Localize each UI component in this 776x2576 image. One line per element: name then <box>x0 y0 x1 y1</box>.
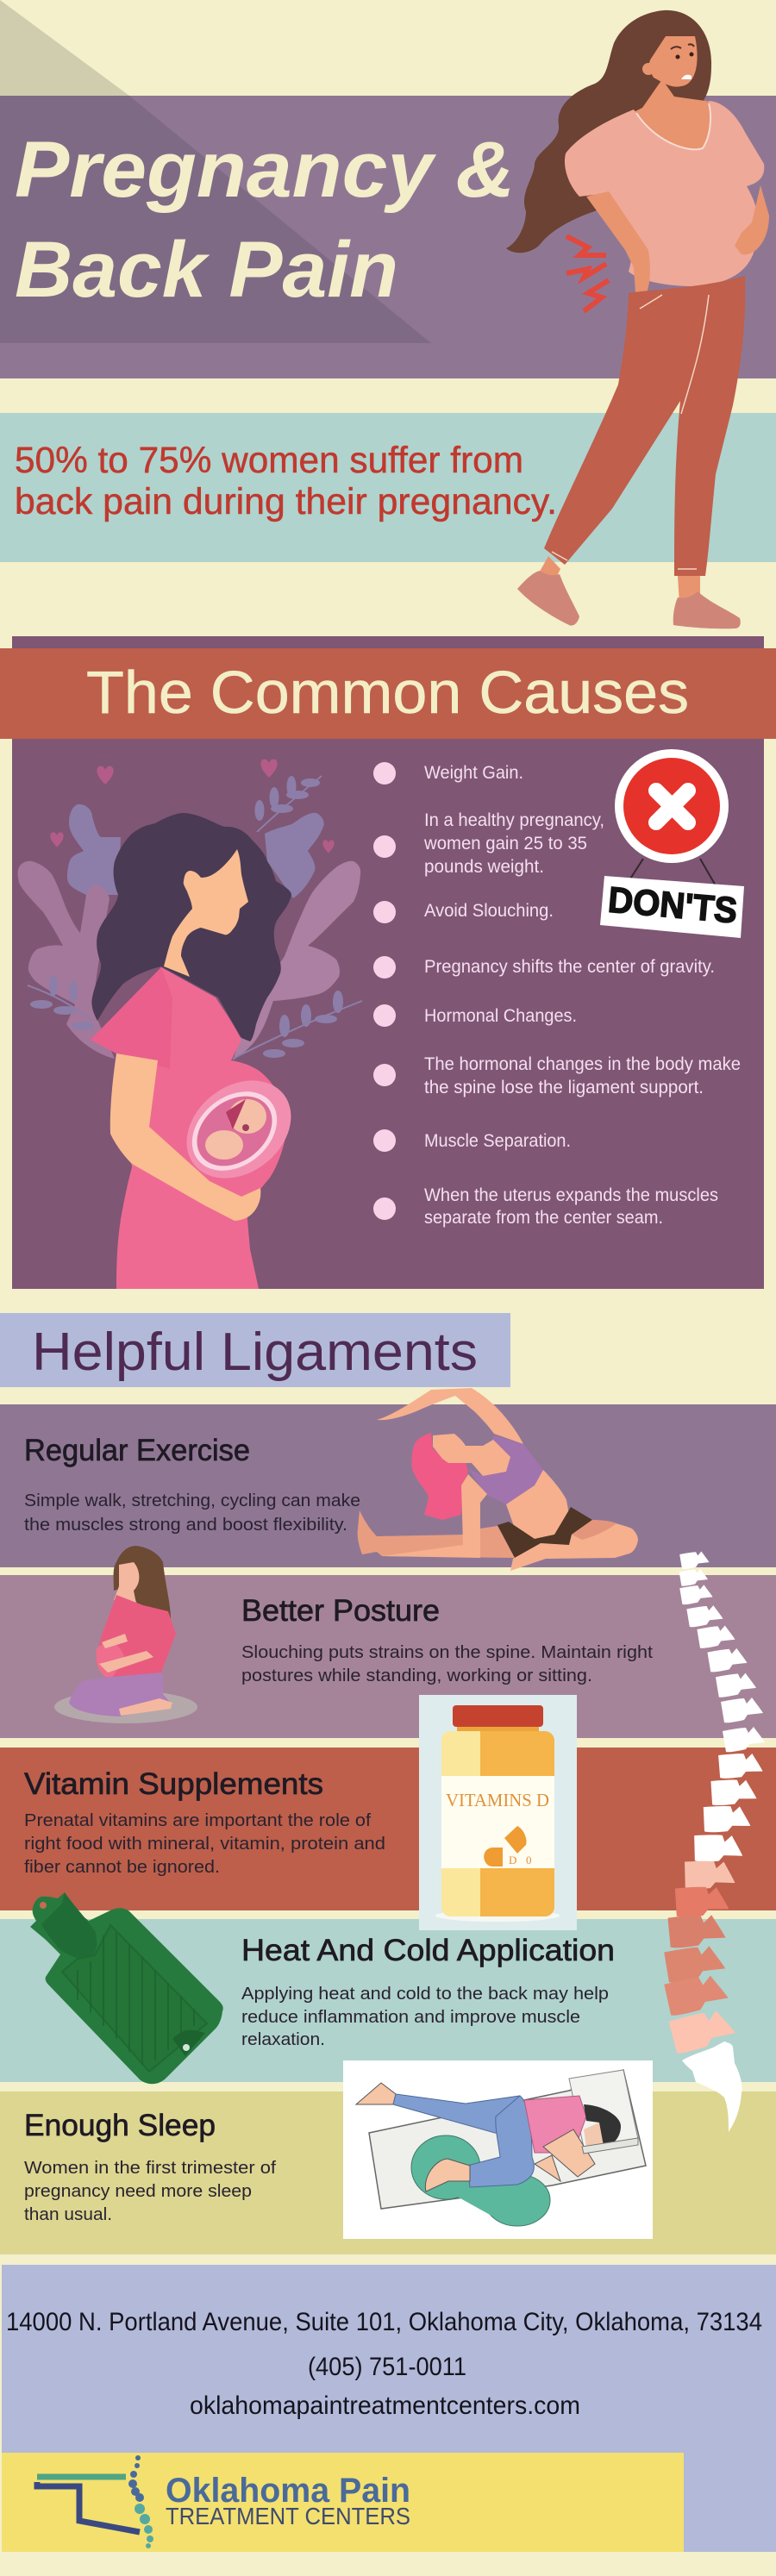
illustration: yoga stretch <box>358 1388 638 1571</box>
panel: regular exercise: the muscles strong and boost flexibility. <box>24 1515 347 1535</box>
bullet list: Hormonal Changes. <box>424 1006 577 1026</box>
illustration: hot water bottle <box>30 1892 223 2084</box>
panel: enough sleep: Enough Sleep <box>24 2109 216 2142</box>
panel: enough sleep: than usual. <box>24 2204 112 2224</box>
header panel <box>0 0 776 378</box>
bullet list <box>373 762 741 1228</box>
illustration: vitamin d bottle: VITAMINS D <box>446 1790 549 1810</box>
panel: regular exercise <box>0 1404 776 1567</box>
bullets <box>373 762 396 1220</box>
panel: vitamin supplements: Prenatal vitamins are important the role of <box>24 1810 371 1830</box>
illustration: vitamin d bottle <box>419 1695 577 1930</box>
statistic band: back pain during their pregnancy. <box>15 481 557 522</box>
title: Pregnancy & <box>15 126 515 214</box>
bullet list: Muscle Separation. <box>424 1131 571 1151</box>
panel: heat and cold: Heat And Cold Application <box>241 1934 615 1967</box>
panel: better posture: Slouching puts strains on the spine. Maintain right <box>241 1642 653 1662</box>
icon: oklahoma outline and spine dots <box>37 2455 153 2548</box>
panel: enough sleep: pregnancy need more sleep <box>24 2181 252 2201</box>
bullet list: Pregnancy shifts the center of gravity. <box>424 957 715 977</box>
illustration: vitamin d bottle: 0 <box>526 1854 531 1866</box>
icon: fetus in womb <box>167 1060 310 1198</box>
heading: helpful ligaments: Helpful Ligaments <box>32 1322 478 1382</box>
bullet list: The hormonal changes in the body make <box>424 1054 741 1074</box>
illustration: pregnant woman with back pain <box>506 10 769 628</box>
panel: common causes <box>0 636 776 1289</box>
panel: vitamin supplements <box>0 1748 776 1910</box>
heading: helpful ligaments <box>0 1313 510 1387</box>
illustration: spine <box>664 1552 765 2132</box>
logo: oklahoma pain treatment centers <box>2 2453 684 2552</box>
bullet list: pounds weight. <box>424 857 544 877</box>
illustration: mother with fetus <box>18 760 362 1289</box>
bullet list: Avoid Slouching. <box>424 901 554 921</box>
logo: oklahoma pain treatment centers: Oklahoma Pain <box>166 2472 410 2510</box>
panel: better posture: Better Posture <box>241 1594 440 1628</box>
panel: enough sleep: Women in the first trimester of <box>24 2158 276 2178</box>
panel: better posture: postures while standing, working or sitting. <box>241 1666 592 1685</box>
panel: regular exercise: Simple walk, stretching, cycling can make <box>24 1491 360 1510</box>
panel: vitamin supplements: fiber cannot be ignored. <box>24 1857 220 1877</box>
bullet list: When the uterus expands the muscles <box>424 1185 718 1205</box>
footer contact panel: oklahomapaintreatmentcenters.com <box>190 2392 580 2420</box>
footer contact panel <box>2 2265 776 2552</box>
bullet list: In a healthy pregnancy, <box>424 810 604 830</box>
icon: pain zigzags <box>566 236 609 311</box>
panel: heat and cold: Applying heat and cold to the back may help <box>241 1984 609 2004</box>
panel: vitamin supplements: right food with mineral, vitamin, protein and <box>24 1834 385 1854</box>
footer contact panel: (405) 751-0011 <box>308 2353 466 2381</box>
title: Back Pain <box>15 226 398 314</box>
panel: regular exercise: Regular Exercise <box>24 1434 250 1467</box>
illustration: kneeling woman <box>54 1546 197 1723</box>
panel: better posture <box>0 1575 776 1738</box>
bullet list: separate from the center seam. <box>424 1208 663 1228</box>
illustration: vitamin d bottle: D <box>509 1854 516 1866</box>
panel: heat and cold <box>0 1919 776 2082</box>
bullet list: women gain 25 to 35 <box>423 834 587 853</box>
icon: don'ts sign: DON'TS <box>606 879 739 931</box>
statistic band: 50% to 75% women suffer from <box>15 440 523 481</box>
bullet list: Weight Gain. <box>424 763 523 783</box>
title <box>15 126 515 314</box>
panel: heat and cold: reduce inflammation and improve muscle <box>241 2007 580 2027</box>
panel: heat and cold: relaxation. <box>241 2029 325 2049</box>
panel: vitamin supplements: Vitamin Supplements <box>24 1767 323 1801</box>
logo: oklahoma pain treatment centers: TREATMENT CENTERS <box>166 2503 410 2529</box>
bullet list: the spine lose the ligament support. <box>424 1078 704 1097</box>
icon: don'ts sign <box>600 749 744 938</box>
panel: enough sleep <box>0 2091 776 2254</box>
illustration: sleeping woman with pillow <box>343 2060 653 2239</box>
statistic band <box>0 413 776 562</box>
heading: the common causes: The Common Causes <box>86 659 689 726</box>
